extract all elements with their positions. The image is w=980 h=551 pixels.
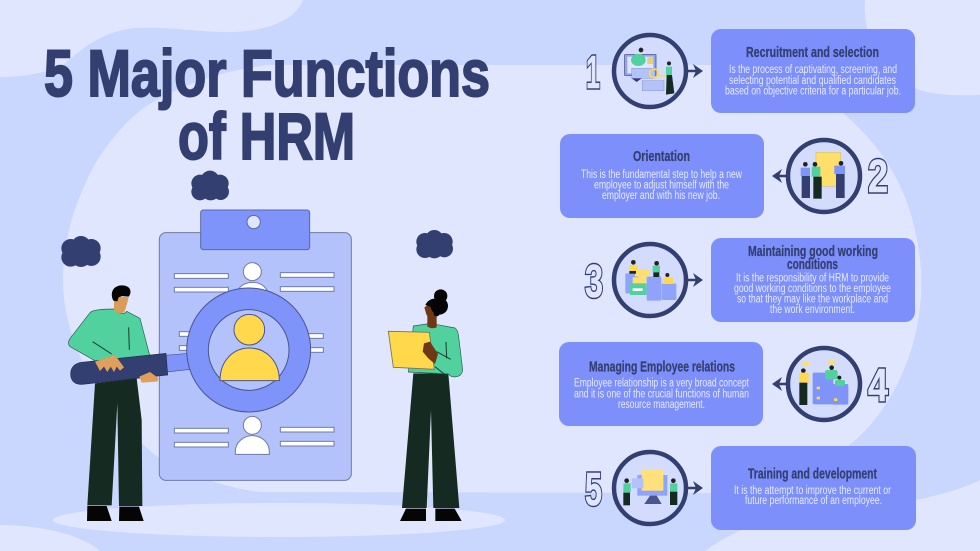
magnifying glass lens [165, 288, 311, 412]
icon: clouds [61, 171, 453, 267]
panel: training and development [711, 446, 916, 530]
panel: orientation [560, 134, 764, 218]
clipboard [159, 210, 351, 480]
panel: training and development: future performance of an employee. [745, 495, 882, 507]
icon: orientation [801, 152, 845, 199]
step 4 marker: 4 [868, 359, 888, 411]
step 2 marker: 2 [868, 150, 888, 202]
title [44, 36, 490, 173]
panel: maintaining good working conditions: Maintaining good working [748, 244, 878, 260]
panel: training and development: It is the attempt to improve the current or [734, 485, 891, 497]
panel: orientation: This is the fundamental step to help a new [581, 169, 743, 181]
icon: training [623, 469, 677, 505]
panel: maintaining good working conditions [711, 238, 915, 322]
panel: recruitment and selection [711, 29, 915, 113]
panel: orientation: Orientation [633, 149, 690, 165]
panel: orientation: employee to adjust himself with the [594, 180, 729, 192]
title: of HRM [178, 99, 355, 173]
panel: managing employee relations [559, 342, 763, 426]
icon: recruitment [625, 48, 674, 95]
panel: orientation: employer and with his new job. [602, 190, 720, 202]
person: woman with folder [388, 289, 463, 521]
panel: maintaining good working conditions: the work environment. [770, 304, 855, 316]
panel: maintaining good working conditions: so that they may like the workplace and [737, 294, 888, 306]
panel: recruitment and selection: Recruitment and selection [746, 45, 879, 61]
panel: maintaining good working conditions: conditions [787, 257, 838, 273]
panel: maintaining good working conditions: It is the responsibility of HRM to provide [736, 272, 889, 284]
step 3 marker: 3 [585, 255, 603, 307]
panel: training and development: Training and development [748, 467, 877, 483]
icon: employee relations [799, 360, 848, 405]
panel: managing employee relations: Employee relationship is a very broad concept [574, 378, 750, 390]
step 4 marker [772, 348, 888, 420]
step 1 marker: 1 [586, 46, 600, 98]
step 5 marker: 5 [585, 463, 602, 515]
step 2 marker [772, 140, 888, 212]
step 4 marker: 4 [868, 359, 888, 411]
panel: recruitment and selection: selecting potential and qualified candidates [729, 75, 896, 87]
step 3 marker: 3 [585, 255, 603, 307]
icon: working conditions [625, 260, 676, 301]
person: man with magnifier [68, 285, 168, 521]
panel: managing employee relations: and it is one of the crucial functions of human [574, 388, 749, 400]
panel: recruitment and selection: based on objective criteria for a particular job. [725, 86, 901, 98]
step 2 marker: 2 [868, 150, 888, 202]
step 1 marker [586, 35, 703, 107]
panel: maintaining good working conditions: good working conditions to the employee [734, 283, 891, 295]
step 1 marker: 1 [586, 46, 600, 98]
panel: recruitment and selection: Is the process of captivating, screening, and [729, 64, 897, 76]
step 5 marker: 5 [585, 463, 602, 515]
step 3 marker [585, 244, 703, 316]
title: 5 Major Functions [44, 36, 490, 110]
step 5 marker [585, 452, 703, 524]
main illustration [61, 171, 463, 521]
panel: managing employee relations: Managing Employee relations [589, 360, 735, 376]
panel: managing employee relations: resource management. [618, 399, 705, 411]
